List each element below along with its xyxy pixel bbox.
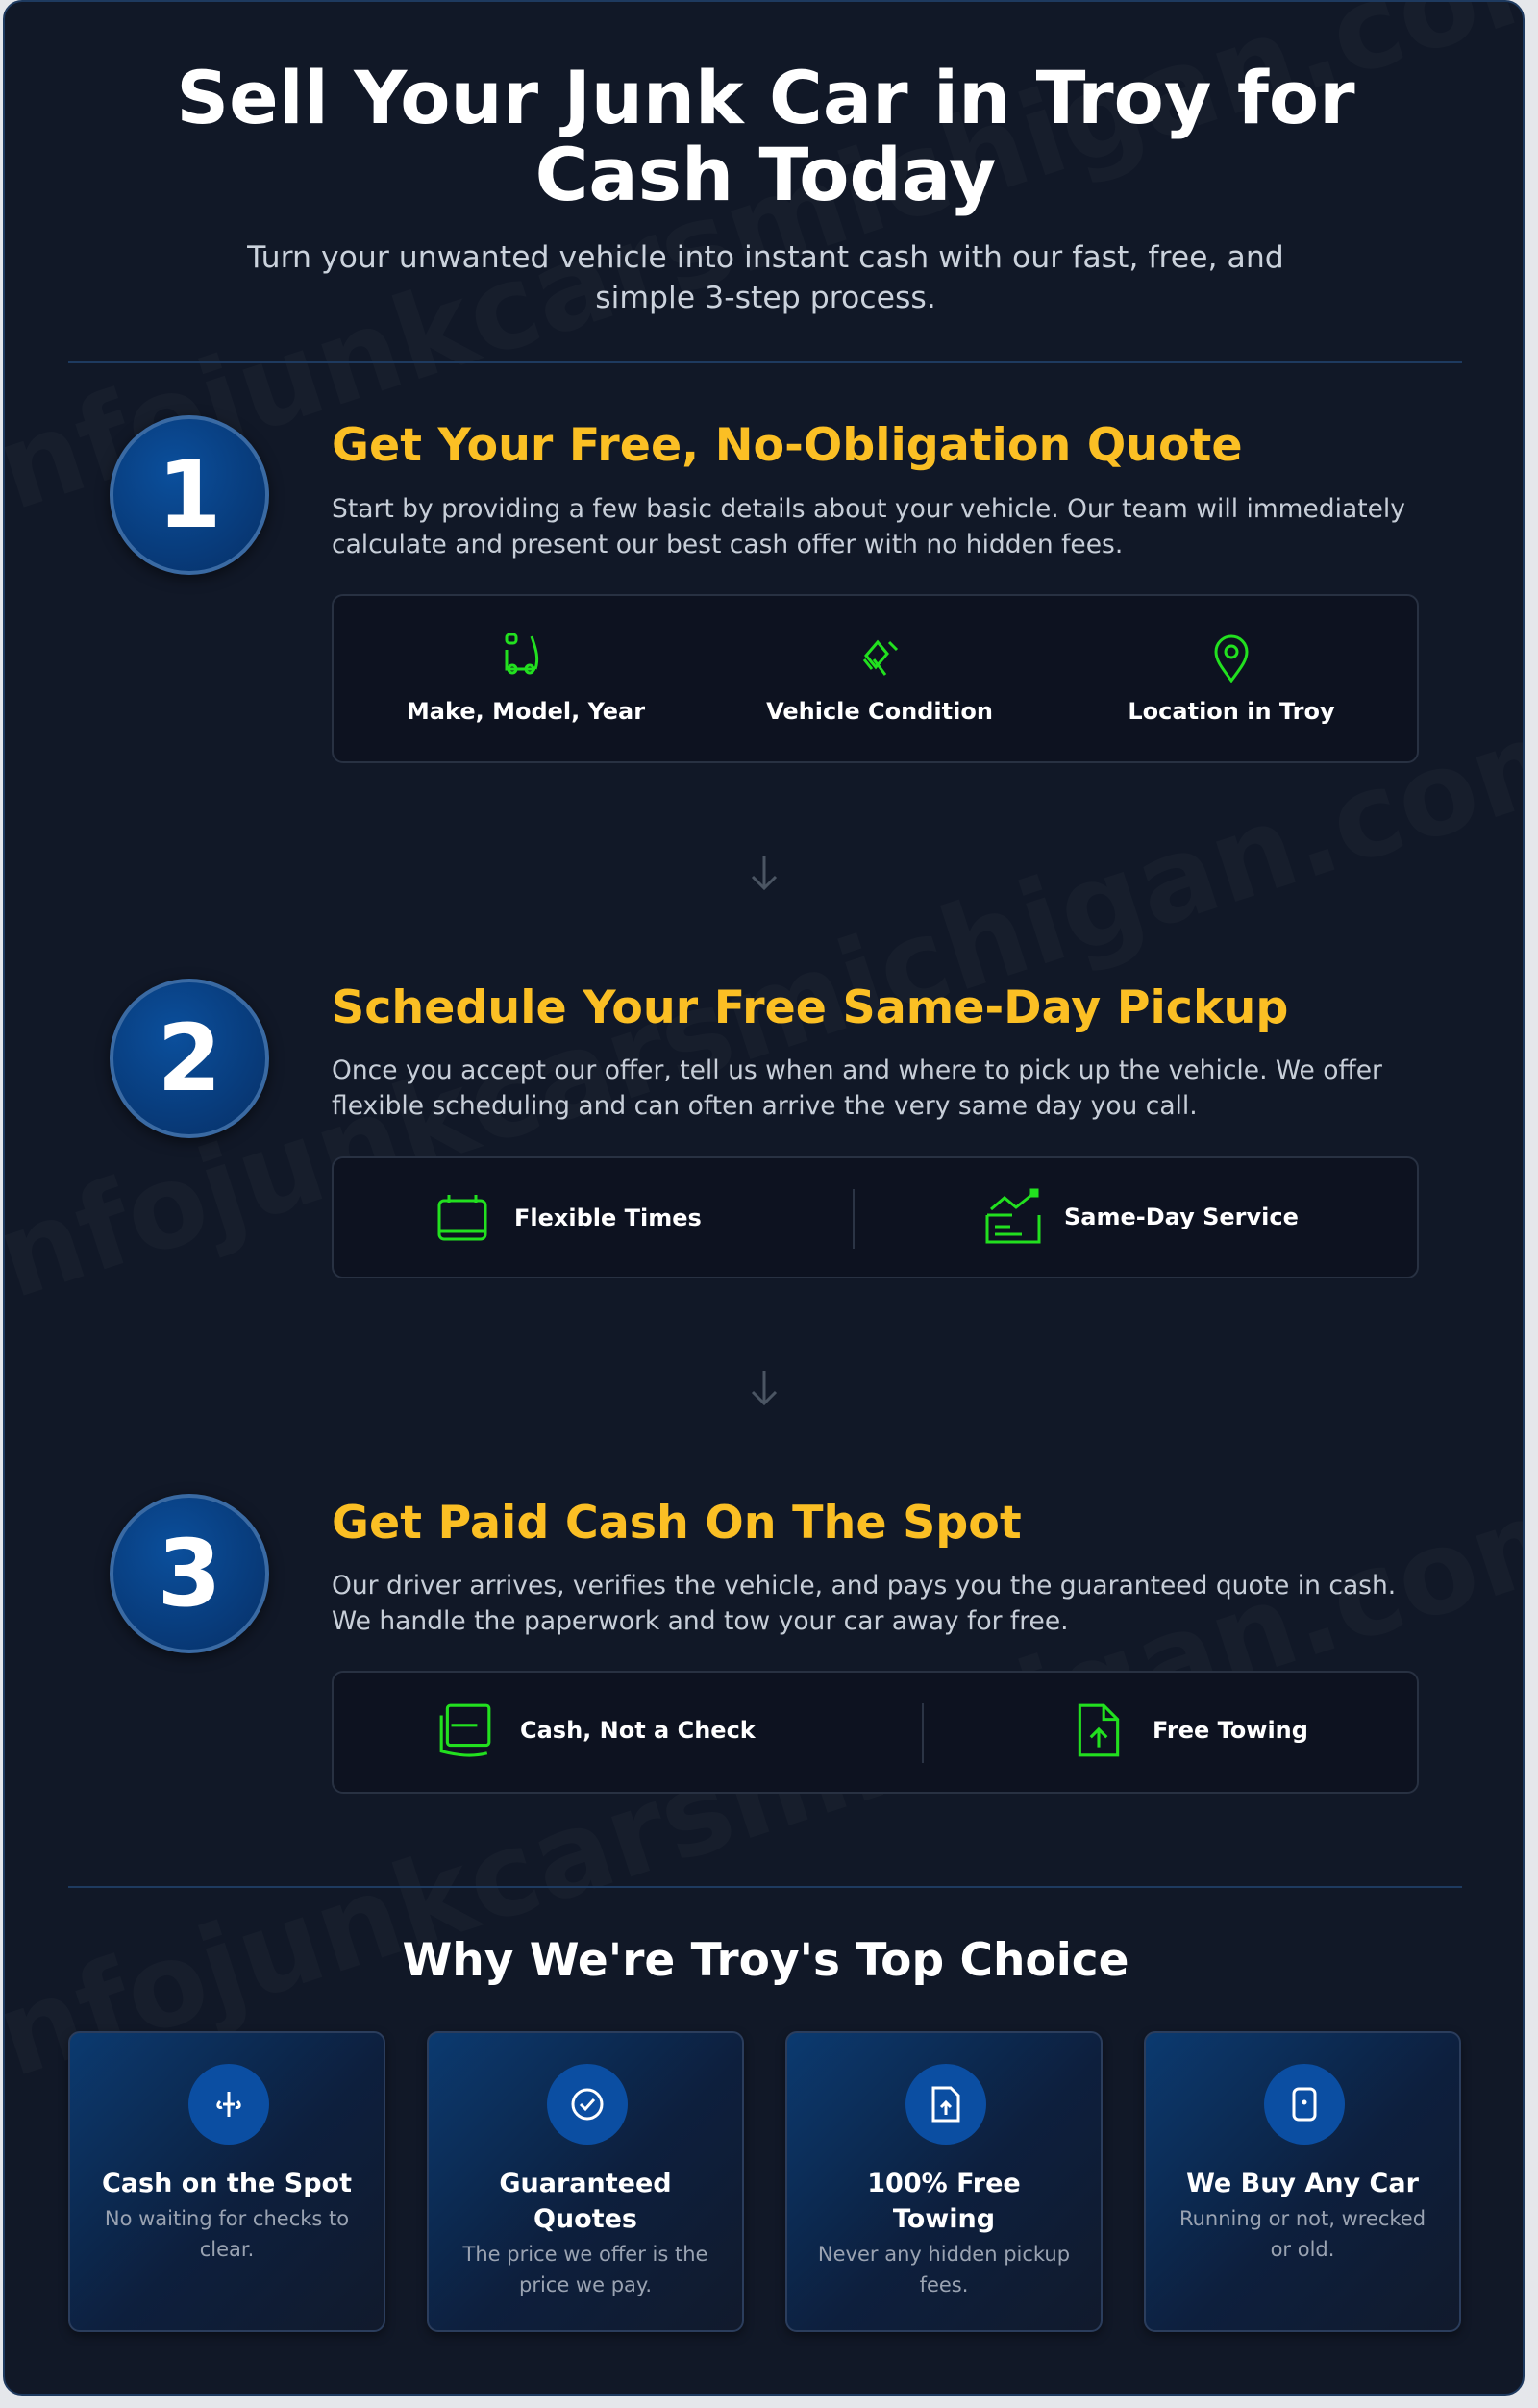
icon: gavel <box>863 640 898 676</box>
card: guaranteed quotes <box>427 2031 744 2332</box>
card: we buy any car: Running or not, wrecked <box>1179 2207 1426 2230</box>
icon: check circle <box>547 2064 628 2145</box>
card: guaranteed quotes: price we pay. <box>519 2273 652 2296</box>
item: free towing: Free Towing <box>1153 1717 1308 1744</box>
step 1 info box <box>332 594 1419 763</box>
item: make model year: Make, Model, Year <box>407 698 645 725</box>
step 2 info box <box>332 1156 1419 1278</box>
step 3 info box <box>332 1671 1419 1794</box>
item: location <box>1128 634 1335 725</box>
arrow 1 <box>752 856 777 890</box>
card: guaranteed quotes: Guaranteed <box>499 2169 672 2198</box>
title: Cash Today <box>535 132 996 217</box>
card: we buy any car: We Buy Any Car <box>1186 2169 1419 2198</box>
arrow 2 <box>752 1371 777 1405</box>
icon: car <box>506 633 538 675</box>
item: cash not a check <box>440 1703 756 1757</box>
item: vehicle condition <box>766 640 993 725</box>
card: guaranteed quotes: Quotes <box>533 2204 637 2234</box>
card: free towing: 100% Free <box>867 2169 1021 2198</box>
step 2 heading: Schedule Your Free Same-Day Pickup <box>332 981 1288 1034</box>
item: cash not a check: Cash, Not a Check <box>520 1717 756 1744</box>
step 2 number: 2 <box>158 1005 221 1112</box>
step 2 description: Once you accept our offer, tell us when and where to pick up the vehicle. We offer flexible scheduling and can often arrive the very same day you call. <box>332 1055 1382 1121</box>
step 1 number <box>110 415 269 575</box>
item: vehicle condition: Vehicle Condition <box>766 698 993 725</box>
step 3 number: 3 <box>158 1520 221 1627</box>
card: cash on the spot: No waiting for checks to <box>105 2207 349 2230</box>
title <box>176 55 1355 217</box>
section heading: why choose us: Why We're Troy's Top Choice <box>402 1934 1129 1987</box>
item: flexible times: Flexible Times <box>514 1204 702 1231</box>
step 3 heading: Get Paid Cash On The Spot <box>332 1497 1022 1550</box>
card: cash on the spot: clear. <box>200 2238 254 2261</box>
item: location: Location in Troy <box>1128 698 1335 725</box>
step 3 number <box>110 1494 269 1653</box>
step 1 description: Start by providing a few basic details about your vehicle. Our team will immediately calculate and present our best cash offer with no hidden fees. <box>332 494 1405 559</box>
icon: phone <box>1264 2064 1345 2145</box>
icon: cash hand <box>188 2064 269 2145</box>
step 1 heading: Get Your Free, No-Obligation Quote <box>332 419 1243 472</box>
item: same-day service <box>986 1188 1299 1244</box>
icon: calendar <box>438 1195 486 1240</box>
card: free towing: Towing <box>893 2204 995 2234</box>
item: make model year <box>407 633 646 725</box>
card: free towing <box>785 2031 1103 2332</box>
card: we buy any car <box>1144 2031 1461 2332</box>
item: free towing <box>1079 1703 1308 1757</box>
icon: map pin <box>1215 634 1248 683</box>
step 3 description: Our driver arrives, verifies the vehicle, and pays you the guaranteed quote in cash. We handle the paperwork and tow your car away for free. <box>332 1571 1396 1636</box>
subtitle: Turn your unwanted vehicle into instant cash with our fast, free, and <box>247 240 1284 275</box>
item: flexible times <box>438 1195 702 1240</box>
step 2 number <box>110 979 269 1138</box>
icon: cash <box>440 1703 490 1757</box>
item: same-day service: Same-Day Service <box>1064 1204 1299 1230</box>
card: cash on the spot <box>68 2031 385 2332</box>
card: cash on the spot: Cash on the Spot <box>102 2169 352 2198</box>
subtitle: simple 3-step process. <box>595 281 936 315</box>
subtitle <box>247 240 1284 315</box>
icon: document <box>905 2064 986 2145</box>
icon: file upload <box>1079 1703 1119 1757</box>
icon: chart <box>986 1188 1040 1244</box>
card: we buy any car: or old. <box>1271 2238 1334 2261</box>
card: free towing: Never any hidden pickup <box>818 2243 1070 2266</box>
card: guaranteed quotes: The price we offer is the <box>463 2243 707 2266</box>
title: Sell Your Junk Car in Troy for <box>176 55 1355 140</box>
step 1 number: 1 <box>158 441 221 549</box>
card: free towing: fees. <box>920 2273 968 2296</box>
